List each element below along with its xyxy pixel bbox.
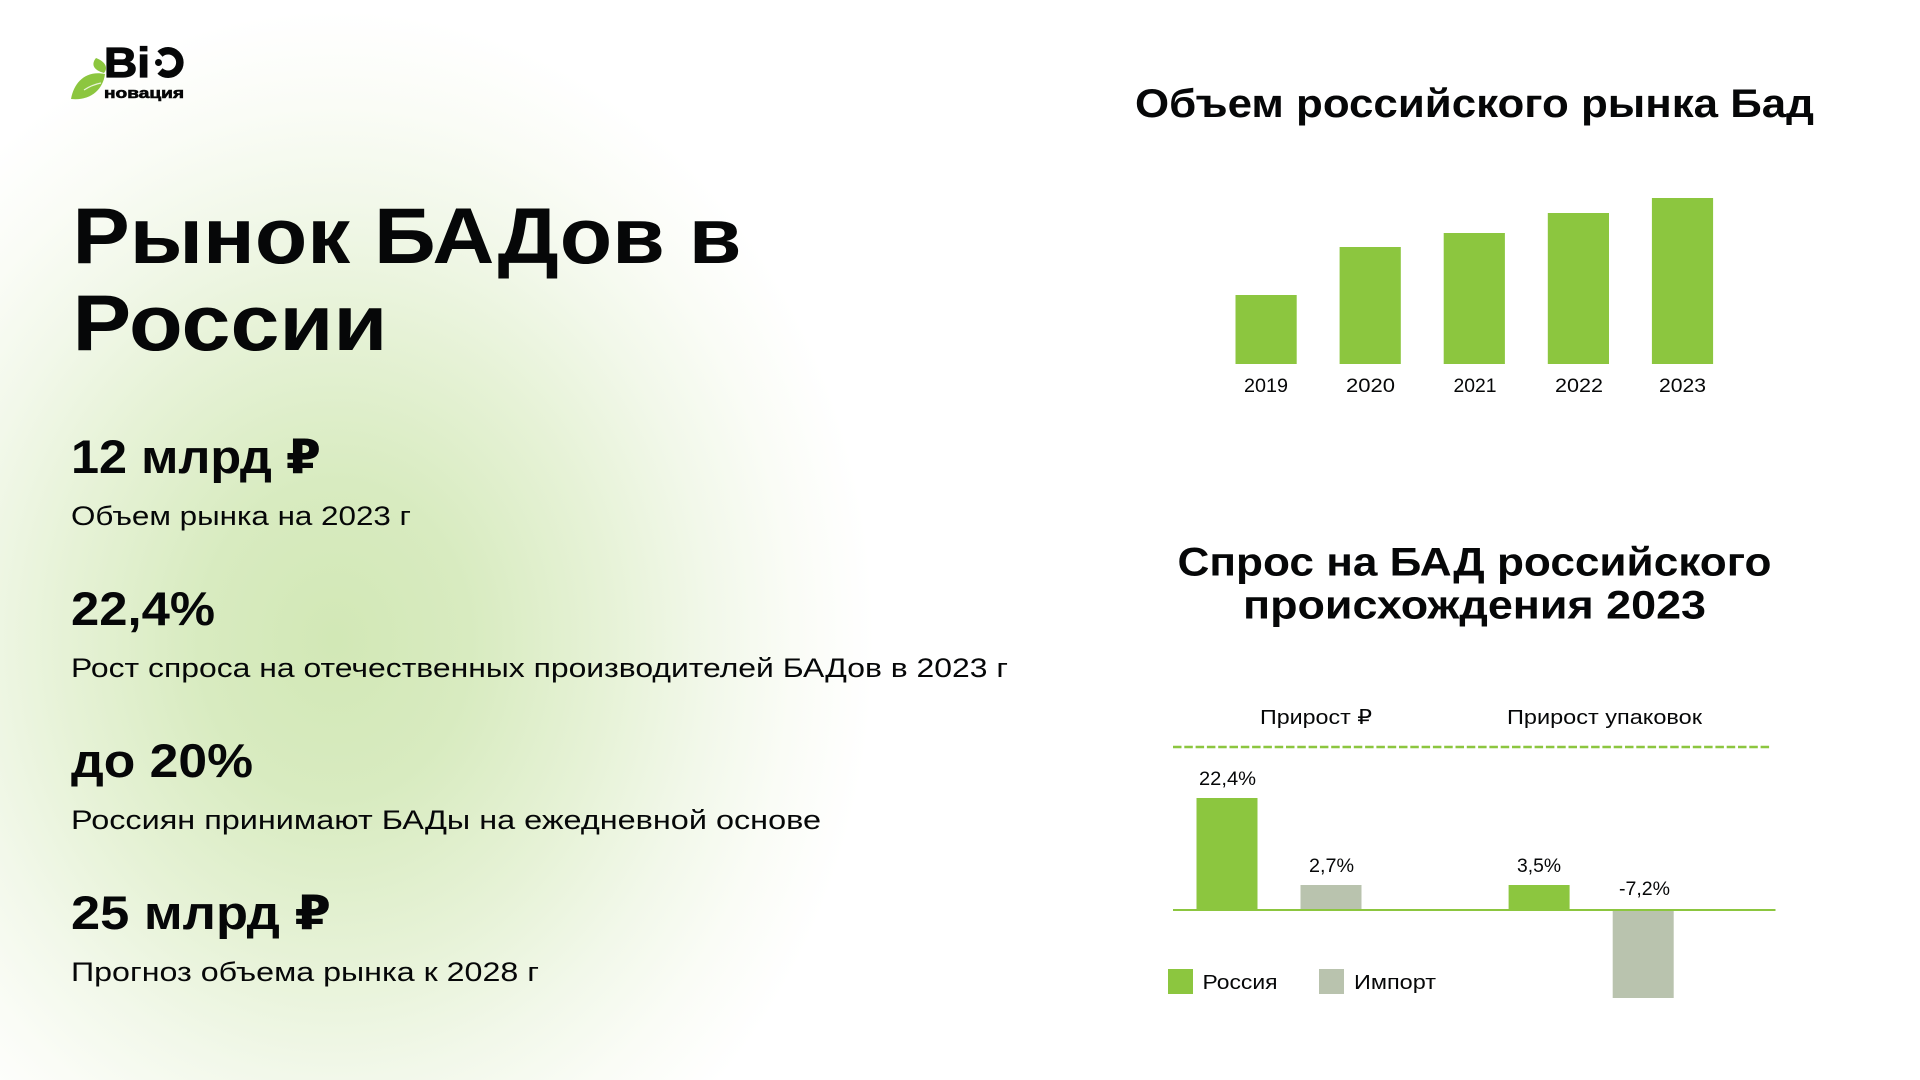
- bar chart: demand growth: 22,4%: [1199, 769, 1256, 790]
- icon: leaves: [71, 58, 106, 99]
- bar chart: demand growth: -7,2%: [1619, 879, 1670, 900]
- heading: market volume chart: Объем российского рынка Бад: [1135, 82, 1814, 126]
- bar chart: market volume by year: 2023: [1659, 376, 1706, 397]
- stat: market volume: 12 млрд ₽: [71, 430, 321, 483]
- bar chart: demand growth: Прирост ₽: [1260, 707, 1372, 729]
- heading: demand chart: происхождения 2023: [1243, 584, 1706, 628]
- logo: [71, 39, 184, 102]
- legend: Импорт: [1354, 972, 1436, 994]
- stat: demand growth: [71, 582, 1008, 683]
- stat: market volume: [71, 430, 411, 531]
- logo wordmark: [104, 39, 184, 102]
- title: России: [72, 278, 388, 367]
- bar chart: demand growth: [1173, 707, 1776, 998]
- legend: [1168, 969, 1436, 994]
- bar chart: market volume by year: 2022: [1555, 376, 1603, 397]
- bar chart: demand growth: 3,5%: [1517, 856, 1561, 877]
- bar chart: market volume by year: 2019: [1244, 376, 1288, 397]
- stat: market volume: Объем рынка на 2023 г: [71, 501, 411, 531]
- stat: forecast: [71, 886, 539, 987]
- stat: demand growth: 22,4%: [71, 582, 215, 635]
- heading: demand chart: [1178, 540, 1772, 628]
- title: [72, 191, 741, 367]
- bar chart: market volume by year: [1236, 198, 1713, 397]
- bar chart: demand growth: 2,7%: [1309, 856, 1354, 877]
- heading: demand chart: Спрос на БАД российского: [1178, 540, 1772, 584]
- bar chart: demand growth: Прирост упаковок: [1507, 707, 1702, 729]
- stat: daily use: Россиян принимают БАДы на ежедневной основе: [71, 805, 821, 835]
- bar chart: market volume by year: 2021: [1454, 376, 1496, 397]
- bar chart: market volume by year: 2020: [1346, 376, 1395, 397]
- logo wordmark: новация: [104, 86, 184, 102]
- stat: daily use: до 20%: [71, 734, 253, 787]
- title: Рынок БАДов в: [72, 191, 741, 280]
- stat: daily use: [71, 734, 821, 835]
- logo wordmark: Bi: [104, 39, 150, 86]
- stat: forecast: Прогноз объема рынка к 2028 г: [71, 957, 539, 987]
- stat: forecast: 25 млрд ₽: [71, 886, 331, 939]
- stat: demand growth: Рост спроса на отечественных производителей БАДов в 2023 г: [71, 653, 1008, 683]
- legend: Россия: [1202, 972, 1278, 994]
